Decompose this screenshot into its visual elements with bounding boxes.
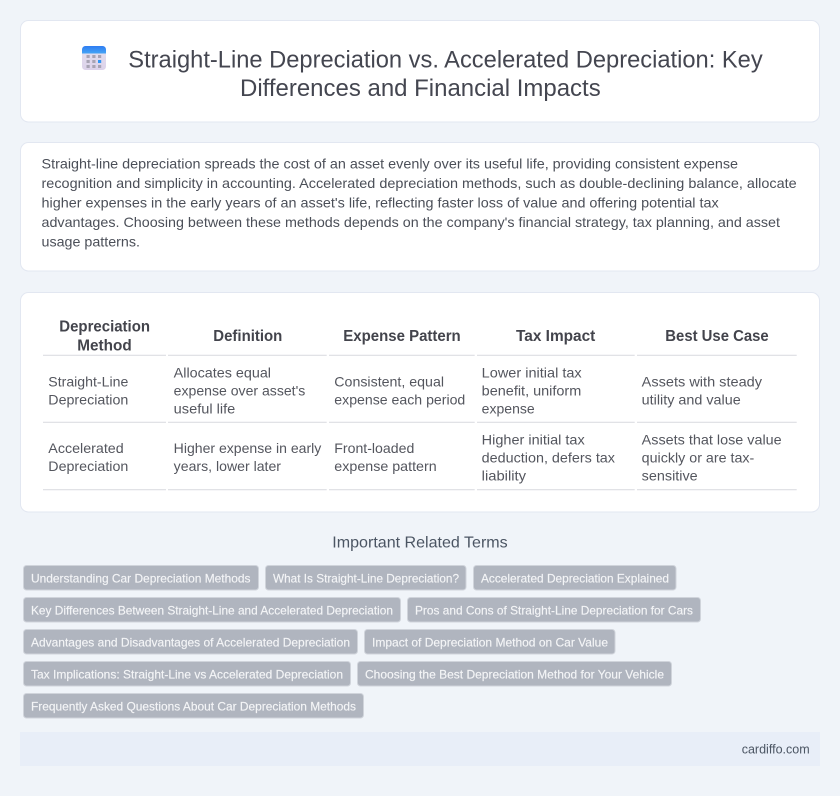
- tag: [24, 630, 358, 654]
- table row: straight-line depreciation: benefit, uniform: [482, 382, 581, 398]
- table row: straight-line depreciation: Allocates equal: [174, 364, 271, 380]
- footer source text: cardiffo.com: [742, 741, 810, 756]
- table row: straight-line depreciation: Straight-Line: [48, 373, 129, 389]
- table row: accelerated depreciation: Front-loaded: [334, 440, 414, 456]
- tag: Impact of Depreciation Method on Car Value: [372, 635, 608, 649]
- table row: straight-line depreciation: Consistent, equal: [334, 373, 444, 389]
- table row: accelerated depreciation: deduction, defers tax: [482, 449, 615, 465]
- table row: straight-line depreciation: expense: [482, 400, 535, 416]
- tag: Accelerated Depreciation Explained: [481, 571, 669, 585]
- tag: Understanding Car Depreciation Methods: [31, 571, 250, 585]
- table row: accelerated depreciation: [43, 431, 797, 490]
- title: [128, 46, 763, 102]
- tag: Pros and Cons of Straight-Line Depreciation for Cars: [415, 603, 693, 617]
- tag: [358, 662, 672, 686]
- text block: intro description: higher expenses in the early years of an asset's life, reflecting faster loss of value and offering potential tax: [42, 194, 719, 210]
- tag: [364, 630, 615, 654]
- panel: intro paragraph: [20, 142, 820, 271]
- table row: accelerated depreciation: expense pattern: [334, 458, 437, 474]
- table row: straight-line depreciation: Depreciation: [48, 391, 128, 407]
- tag: Tax Implications: Straight-Line vs Accelerated Depreciation: [31, 667, 343, 681]
- title: Differences and Financial Impacts: [240, 75, 601, 102]
- footer: [20, 732, 820, 766]
- table header row: Definition: [213, 328, 282, 345]
- text block: intro description: advantages. Choosing between these methods depends on the company's financial strategy, tax planning, and asset: [42, 214, 780, 230]
- text block: intro description: usage patterns.: [42, 234, 140, 250]
- table row: accelerated depreciation: Accelerated: [48, 440, 124, 456]
- panel: comparison table: [20, 292, 820, 512]
- tag: [24, 598, 400, 622]
- table header row: [43, 318, 797, 356]
- table header row: Expense Pattern: [343, 328, 461, 345]
- tag: [408, 598, 700, 622]
- table row: accelerated depreciation: sensitive: [642, 467, 698, 483]
- table row: accelerated depreciation: years, lower later: [174, 458, 281, 474]
- tag: What Is Straight-Line Depreciation?: [273, 571, 459, 585]
- table row: accelerated depreciation: liability: [482, 467, 526, 483]
- table header row: Best Use Case: [665, 328, 769, 345]
- tag: [24, 662, 350, 686]
- table header row: Method: [77, 337, 132, 354]
- text block: intro description: [42, 155, 797, 250]
- table row: accelerated depreciation: Higher expense in early: [174, 440, 321, 456]
- panel: title header: [20, 20, 820, 122]
- icon: calendar: [82, 46, 106, 70]
- table row: straight-line depreciation: useful life: [174, 400, 236, 416]
- table row: accelerated depreciation: Higher initial tax: [482, 431, 585, 447]
- text block: intro description: Straight-line depreciation spreads the cost of an asset evenly over its useful life, providing consistent expense: [42, 155, 738, 171]
- table row: straight-line depreciation: Lower initial tax: [482, 364, 582, 380]
- tag: Frequently Asked Questions About Car Depreciation Methods: [31, 699, 356, 713]
- table row: straight-line depreciation: Assets with steady: [642, 373, 762, 389]
- table row: accelerated depreciation: Assets that lose value: [642, 431, 782, 447]
- table row: straight-line depreciation: utility and value: [642, 391, 741, 407]
- table row: accelerated depreciation: Depreciation: [48, 458, 128, 474]
- tag: [24, 694, 364, 718]
- title: Straight-Line Depreciation vs. Accelerated Depreciation: Key: [128, 46, 763, 74]
- table row: straight-line depreciation: [43, 364, 797, 423]
- tag: Advantages and Disadvantages of Accelerated Depreciation: [31, 635, 350, 649]
- tag: Key Differences Between Straight-Line and Accelerated Depreciation: [31, 603, 393, 617]
- table header row: Depreciation: [59, 318, 150, 335]
- tag: Choosing the Best Depreciation Method for Your Vehicle: [365, 667, 664, 681]
- table row: accelerated depreciation: quickly or are tax-: [642, 449, 755, 465]
- table row: straight-line depreciation: expense over asset's: [174, 382, 305, 398]
- tag list: related terms: [24, 566, 700, 718]
- heading: important related terms: Important Related Terms: [332, 535, 508, 552]
- tag: [474, 566, 676, 590]
- table header row: Tax Impact: [516, 328, 596, 345]
- tag: [24, 566, 258, 590]
- text block: intro description: recognition and simplicity in accounting. Accelerated depreciation methods, such as double-declining balance, allocate: [42, 175, 797, 191]
- tag: [266, 566, 466, 590]
- table row: straight-line depreciation: expense each period: [334, 391, 465, 407]
